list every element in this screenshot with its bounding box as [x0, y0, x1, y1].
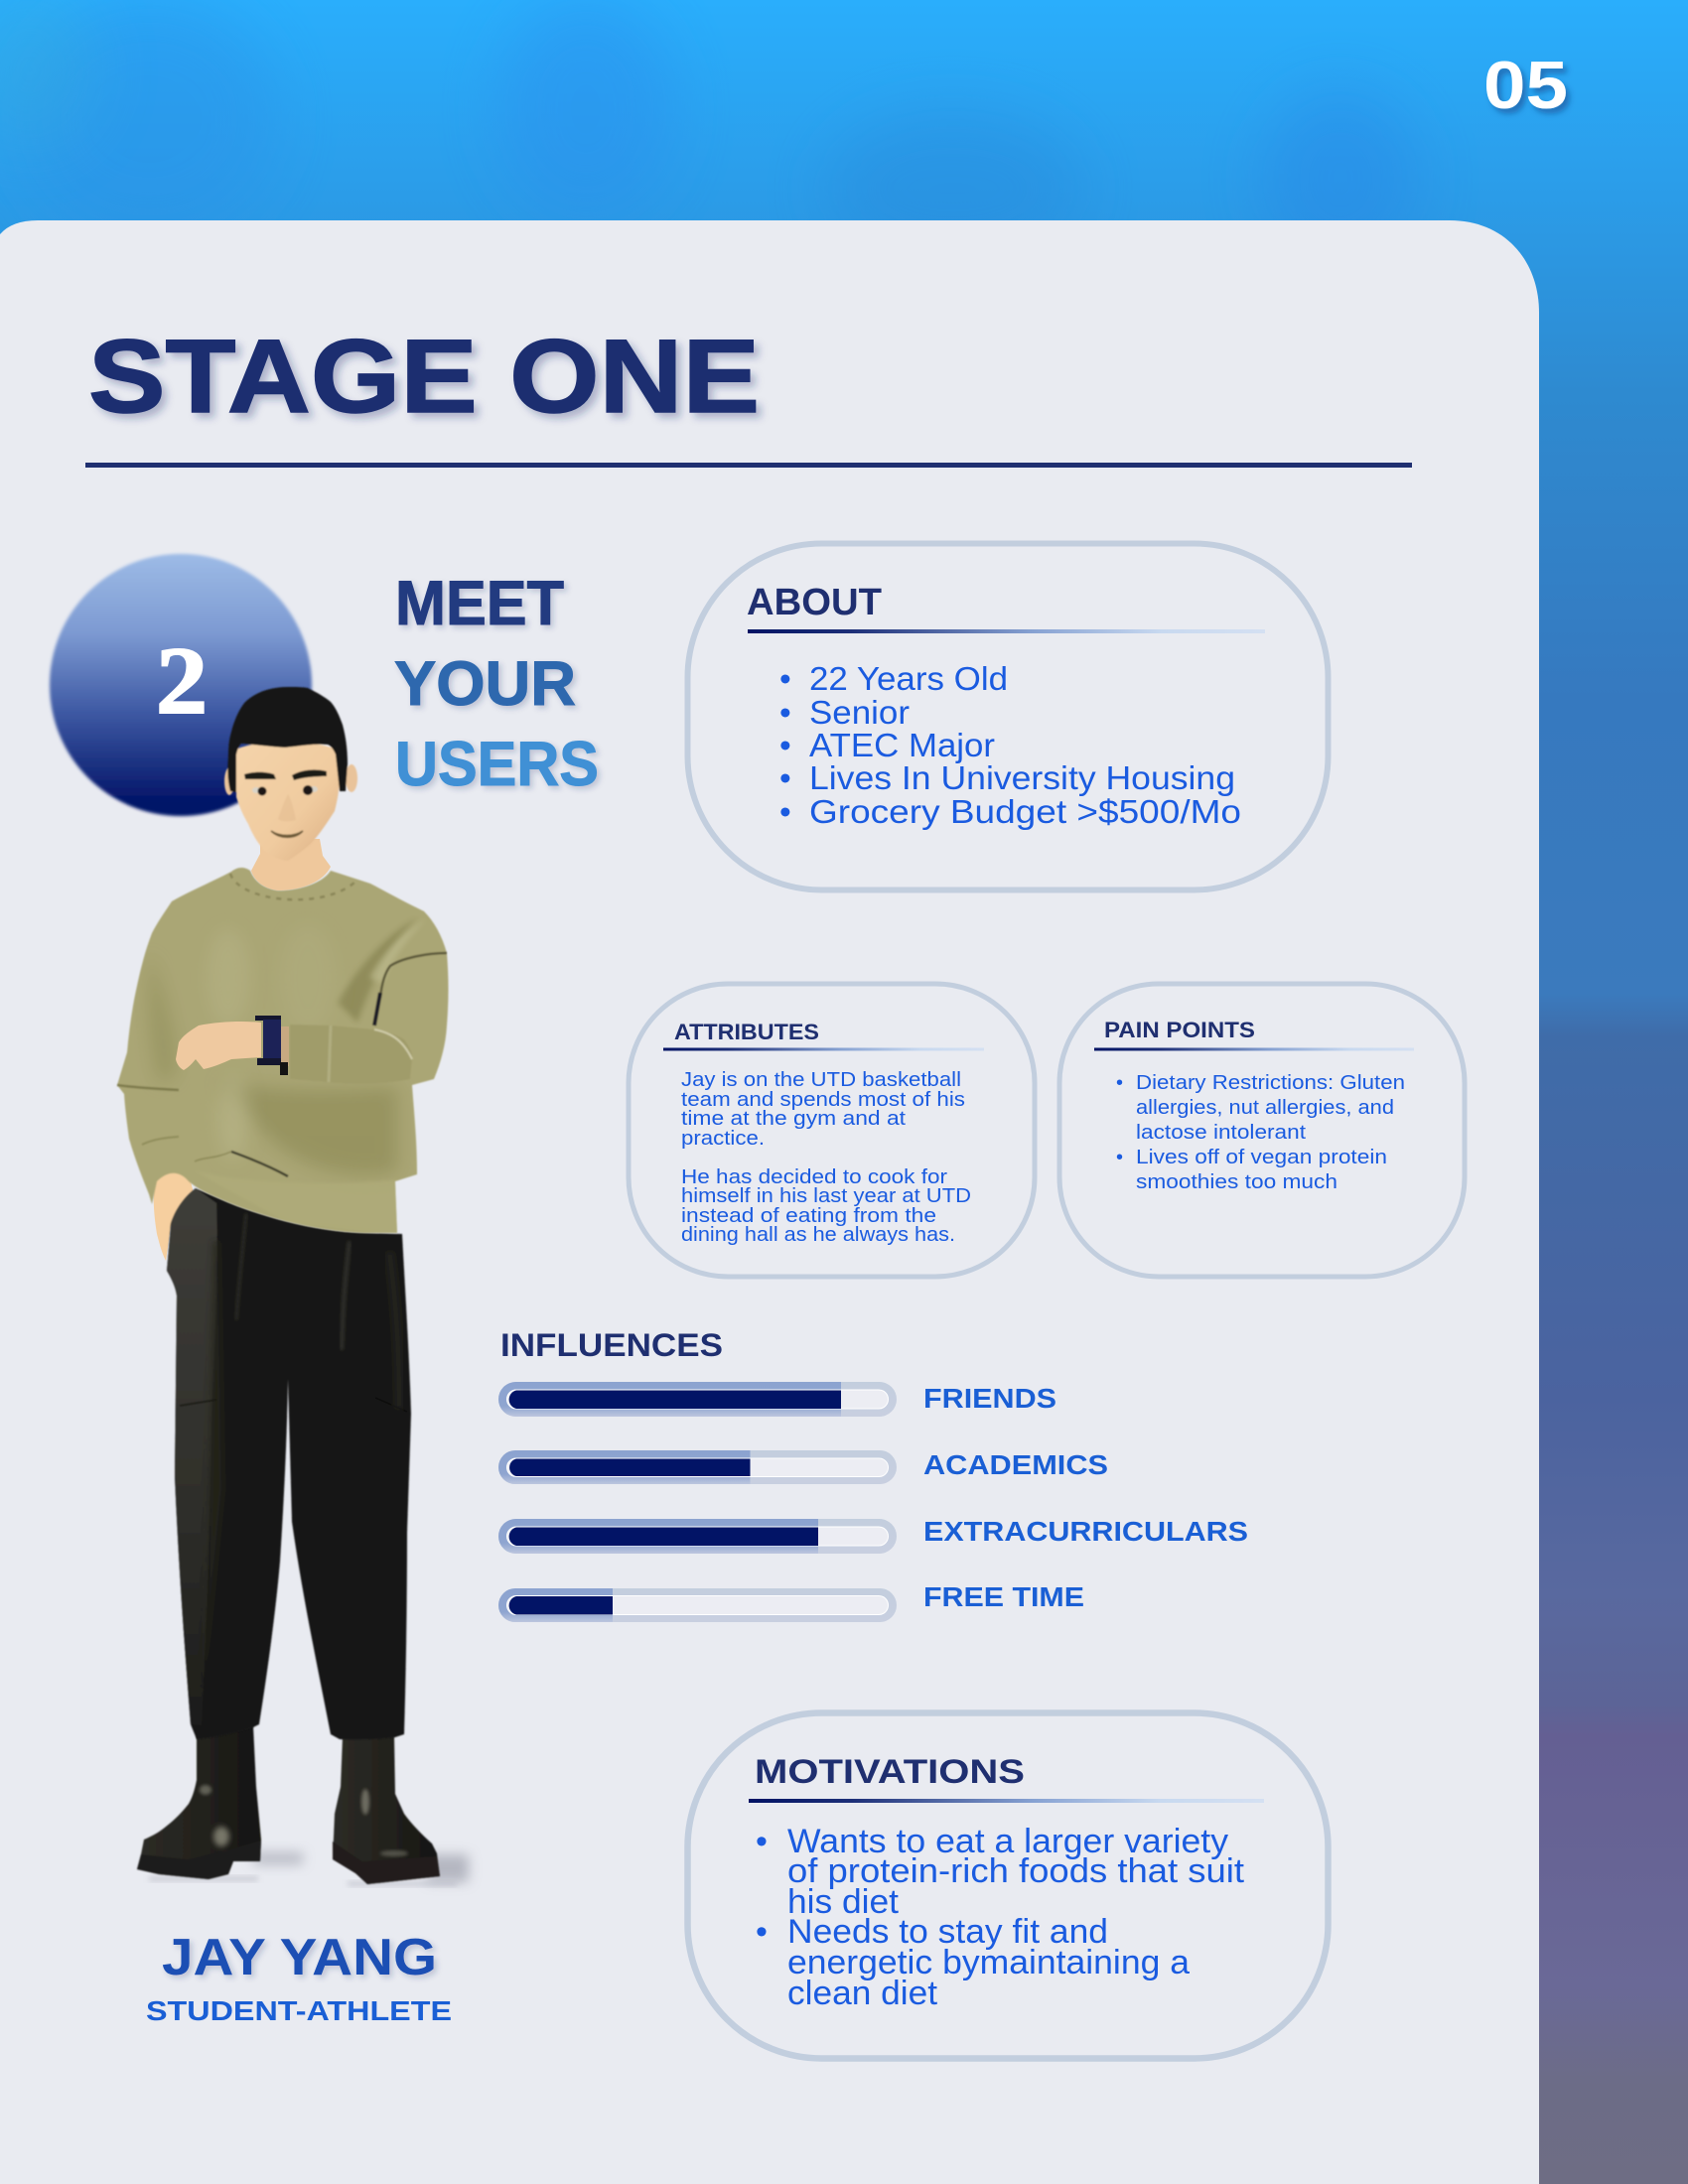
heading: meet your users: YOUR: [394, 649, 576, 719]
panel: attributes: time at the gym and at: [681, 1108, 906, 1130]
panel: attributes: He has decided to cook for: [681, 1166, 947, 1188]
bar: extracurriculars: [498, 1516, 1248, 1554]
panel: attributes: dining hall as he always has.: [681, 1224, 955, 1246]
mouth: [271, 831, 303, 837]
panel: about: •: [779, 695, 791, 732]
panel: motivations: clean diet: [787, 1975, 938, 2012]
role: STUDENT-ATHLETE: [146, 1995, 452, 2026]
eyes: [252, 785, 318, 796]
ears: [224, 764, 357, 795]
panel: motivations: energetic bymaintaining a: [787, 1944, 1190, 1981]
name: JAY YANG: [162, 1929, 437, 1986]
bar: friends: FRIENDS: [923, 1383, 1056, 1414]
influences chart: [498, 1327, 1248, 1622]
panel: attributes: instead of eating from the: [681, 1205, 936, 1227]
heading: meet your users: MEET: [395, 569, 564, 638]
panel: attributes: [629, 984, 1035, 1277]
title rule: [85, 463, 1412, 468]
panel: pain points: smoothies too much: [1136, 1171, 1337, 1193]
bar: friends: [498, 1382, 1056, 1417]
panel: motivations: •: [756, 1913, 768, 1951]
watch hand: [176, 1022, 261, 1070]
panel: about: Lives In University Housing: [809, 760, 1235, 797]
neck: [251, 839, 331, 890]
heading: meet your users: USERS: [395, 730, 599, 799]
bar: academics: ACADEMICS: [923, 1449, 1108, 1480]
panel: about: 22 Years Old: [809, 661, 1008, 698]
panel: pain points: •: [1116, 1072, 1123, 1094]
panel: about: ATEC Major: [809, 728, 995, 764]
panel: motivations: •: [756, 1823, 768, 1860]
sweater seams: [117, 874, 447, 1176]
panel: about: •: [779, 760, 791, 797]
panel: motivations: his diet: [787, 1883, 900, 1921]
bar: free time: FREE TIME: [923, 1581, 1084, 1612]
bar: free time: [498, 1581, 1084, 1622]
face: [236, 743, 340, 861]
bar: extracurriculars: EXTRACURRICULARS: [923, 1516, 1248, 1547]
boots: [137, 1725, 440, 1884]
panel: attributes: practice.: [681, 1128, 765, 1150]
panel: pain points: PAIN POINTS: [1104, 1018, 1255, 1042]
panel: about: Senior: [809, 695, 910, 732]
number badge: 2: [156, 627, 208, 734]
panel: motivations: of protein-rich foods that suit: [787, 1852, 1245, 1890]
panel: pain points: [1059, 984, 1465, 1277]
wristwatch: [255, 1016, 289, 1075]
head: [224, 687, 357, 861]
panel: pain points: Lives off of vegan protein: [1136, 1147, 1387, 1168]
title: STAGE ONE: [88, 319, 760, 435]
sweater shading: [149, 923, 413, 1177]
page number: 05: [1483, 48, 1568, 123]
panel: about: •: [779, 794, 791, 831]
number badge: [50, 554, 312, 816]
panel: about: Grocery Budget >$500/Mo: [809, 794, 1241, 831]
panel: attributes: Jay is on the UTD basketball: [681, 1069, 961, 1091]
panel: about: ABOUT: [747, 582, 882, 623]
trousers: [167, 1188, 411, 1739]
panel: motivations: Needs to stay fit and: [787, 1913, 1108, 1951]
panel: about: [687, 544, 1329, 889]
panel: motivations: [687, 1713, 1329, 2059]
panel: about: •: [779, 728, 791, 764]
panel: attributes: ATTRIBUTES: [674, 1020, 819, 1044]
panel: motivations: Wants to eat a larger variety: [787, 1823, 1228, 1860]
hair: [227, 687, 348, 792]
heading: meet your users: [394, 569, 599, 799]
panel: pain points: lactose intolerant: [1136, 1122, 1306, 1144]
panel: pain points: •: [1116, 1147, 1123, 1168]
influences chart: INFLUENCES: [500, 1327, 723, 1363]
panel: pain points: Dietary Restrictions: Gluten: [1136, 1072, 1405, 1094]
panel: attributes: himself in his last year at UTD: [681, 1185, 971, 1207]
panel: about: •: [779, 661, 791, 698]
panel: motivations: MOTIVATIONS: [755, 1753, 1025, 1791]
sweater: [117, 868, 449, 1236]
panel: pain points: allergies, nut allergies, and: [1136, 1097, 1394, 1119]
brows: [244, 769, 327, 780]
hand in pocket: [154, 1169, 196, 1261]
bar: academics: [498, 1449, 1108, 1484]
sleeve forearm: [290, 1024, 412, 1084]
character illustration: [117, 687, 469, 1886]
floor shadows: [149, 1852, 469, 1886]
panel: attributes: team and spends most of his: [681, 1089, 965, 1111]
nose: [278, 794, 296, 821]
